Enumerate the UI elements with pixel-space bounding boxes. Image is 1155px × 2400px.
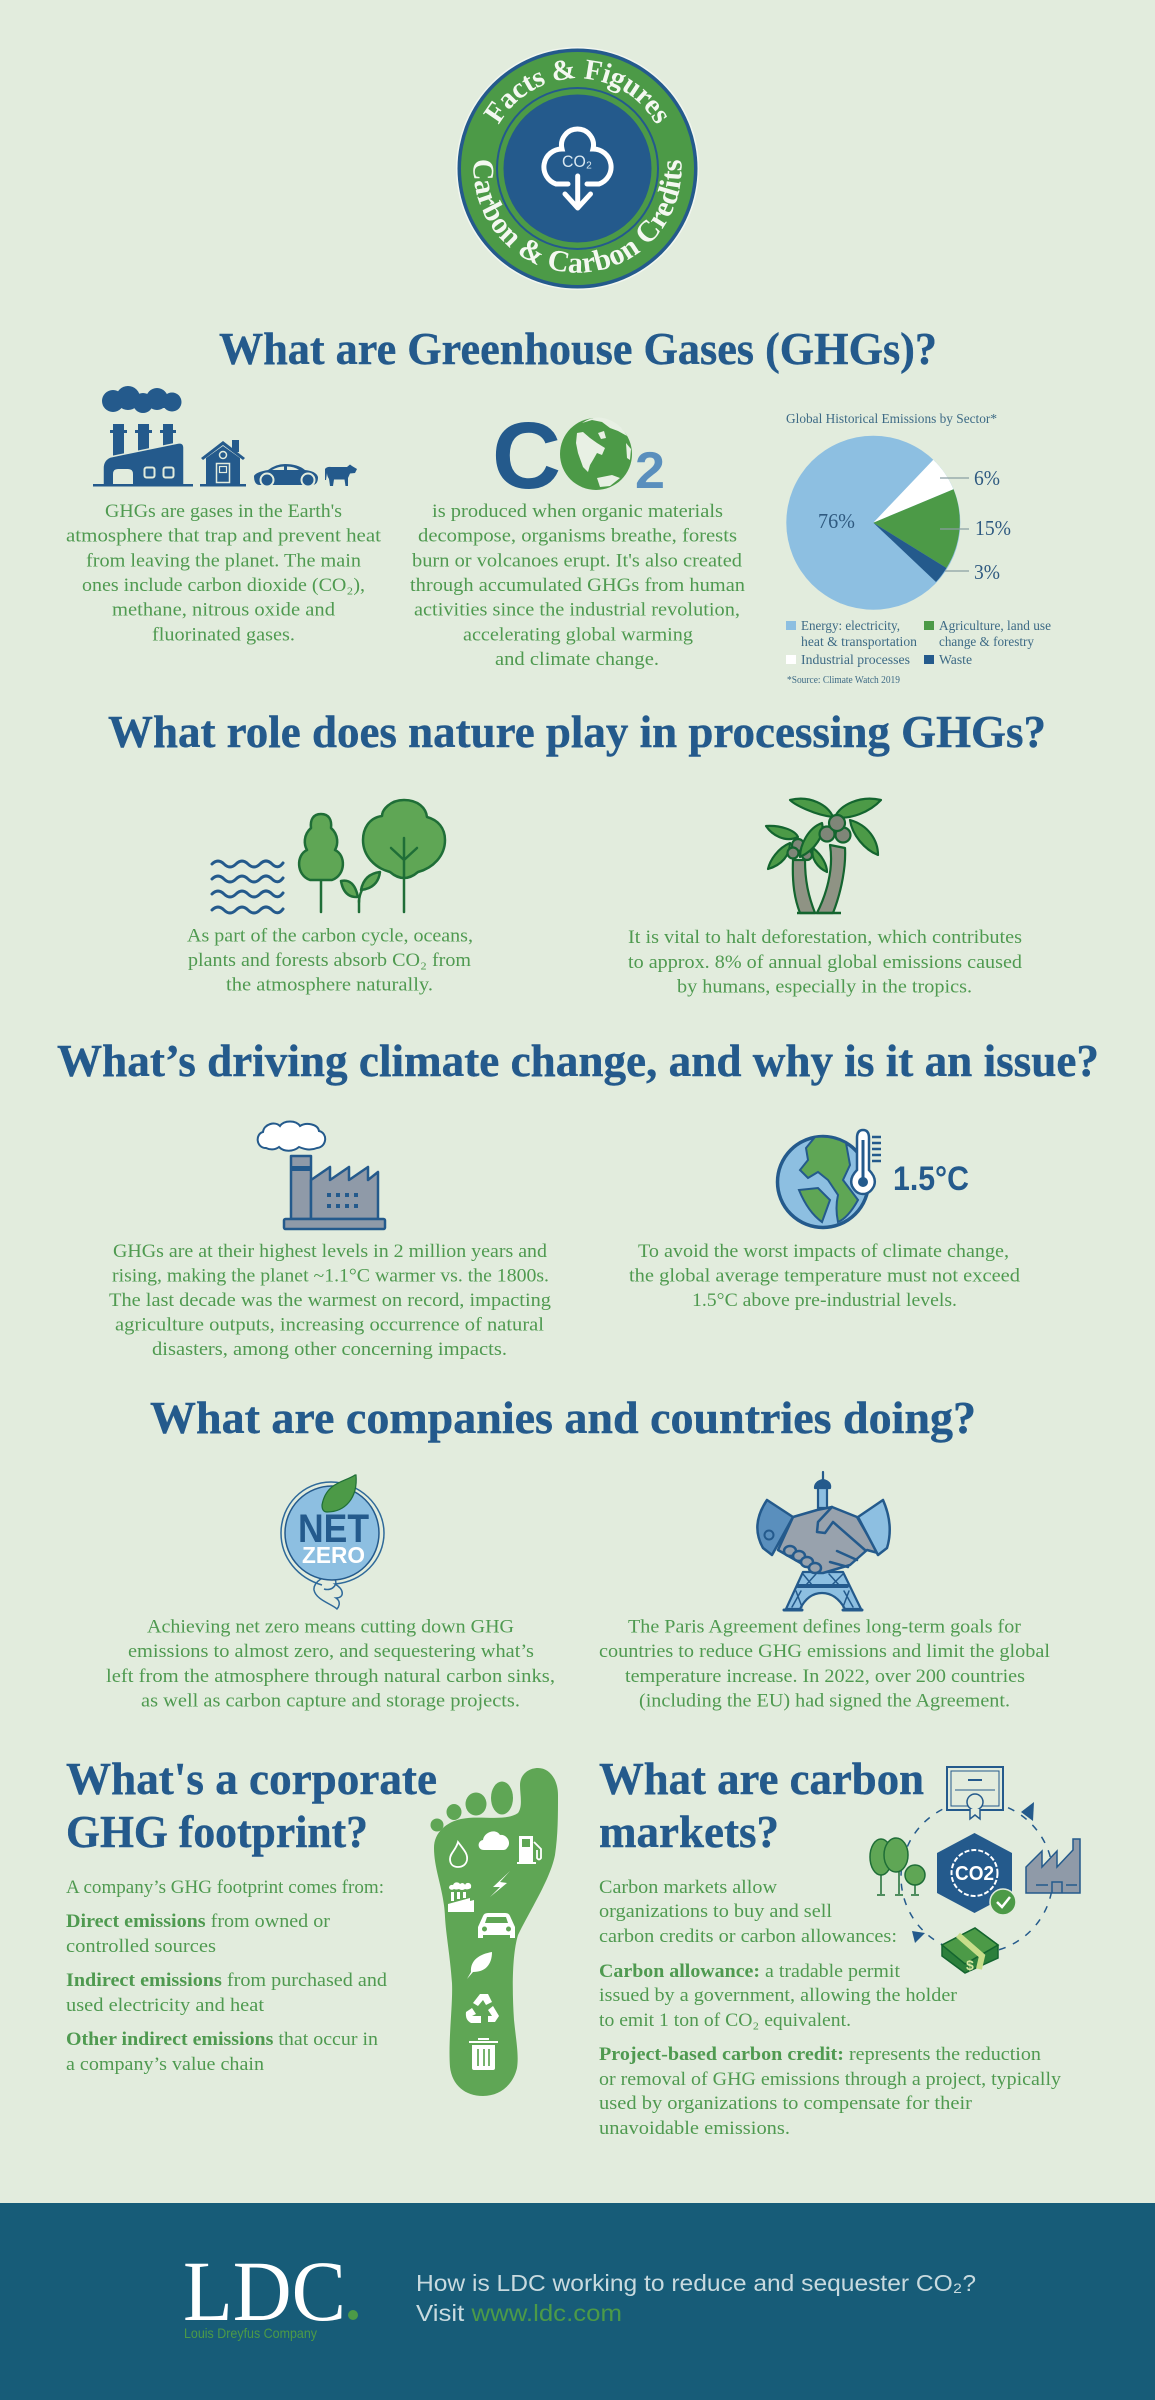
text block: carbon markets: or removal of GHG emissions through a project, typically	[599, 2070, 1062, 2090]
logo: LDC: Louis Dreyfus Company	[184, 2325, 317, 2341]
text block: footprint sources: controlled sources	[66, 1937, 216, 1957]
text block: net zero: emissions to almost zero, and sequestering what’s	[128, 1642, 534, 1662]
icon: CO2 with globe	[492, 403, 665, 509]
heading	[66, 1753, 437, 1857]
pie chart: emissions by sector: 6%	[974, 466, 1000, 490]
text block: CO2 explanation: and climate change.	[495, 650, 659, 670]
section: driving climate change	[57, 1035, 1099, 1360]
section: corporate GHG footprint	[66, 1753, 558, 2096]
heading: What's a corporate	[66, 1753, 437, 1804]
text block: carbon markets: carbon credits or carbon allowances:	[599, 1927, 897, 1947]
text block: CO2 explanation: decompose, organisms breathe, forests	[418, 527, 737, 547]
chart legend: Waste	[939, 652, 972, 667]
text block: carbon cycle: plants and forests absorb CO₂ from	[188, 951, 472, 971]
text block: carbon markets: Carbon allowance: a tradable permit	[599, 1962, 901, 1982]
text block: footprint sources: used electricity and heat	[66, 1996, 265, 2016]
heading	[599, 1753, 924, 1857]
icon: handshake over Eiffel tower	[757, 1472, 890, 1610]
text block: what GHGs are: from leaving the planet. The main	[86, 551, 361, 571]
text block: 1.5 degree limit: 1.5°C above pre-industrial levels.	[692, 1291, 957, 1311]
icon: stack of money: $	[966, 1957, 974, 1973]
heading: What are Greenhouse Gases (GHGs)?	[219, 323, 937, 374]
call to action: Visit www.ldc.com	[416, 2300, 622, 2326]
text block: carbon cycle	[187, 926, 473, 996]
text block: footprint sources: Other indirect emissions that occur in	[66, 2030, 378, 2050]
text block: GHG levels: The last decade was the warmest on record, impacting	[109, 1291, 551, 1311]
icon: cloud with CO2 and down arrow: CO₂	[562, 152, 592, 171]
text block: net zero: left from the atmosphere through natural carbon sinks,	[106, 1667, 555, 1687]
icon: net zero speech bubble with leaf: ZERO	[302, 1542, 365, 1568]
icon: green footprint with emission icons	[430, 1768, 558, 2096]
text block: what GHGs are: methane, nitrous oxide and	[112, 601, 336, 621]
section: What are Greenhouse Gases	[66, 323, 1051, 686]
heading: What are companies and countries doing?	[150, 1392, 976, 1443]
text block: what GHGs are: atmosphere that trap and prevent heat	[66, 527, 382, 547]
text block: carbon cycle: the atmosphere naturally.	[226, 976, 433, 996]
heading: markets?	[599, 1806, 779, 1857]
pie chart: emissions by sector: 76%	[818, 509, 855, 533]
text block: GHG levels: rising, making the planet ~1.1°C warmer vs. the 1800s.	[112, 1266, 549, 1286]
icon: CO2 hexagon with check mark	[937, 1833, 1016, 1915]
badge: Facts & Figures, Carbon & Carbon Credits: Carbon & Carbon Credits	[473, 160, 682, 273]
chart legend: Agriculture, land use	[939, 618, 1051, 633]
text block: deforestation	[628, 928, 1023, 998]
icon: certificate	[947, 1767, 1003, 1819]
icon: carbon market cycle	[870, 1767, 1080, 1973]
text block: Paris Agreement: (including the EU) had signed the Agreement.	[639, 1692, 1010, 1712]
heading: GHG footprint?	[66, 1806, 368, 1857]
text block: GHG levels	[109, 1242, 551, 1360]
icon: factory, house, car and cow	[93, 386, 357, 486]
text block: Paris Agreement: temperature increase. In 2022, over 200 countries	[625, 1667, 1025, 1687]
badge: Facts & Figures, Carbon & Carbon Credits	[456, 47, 699, 290]
text block: what GHGs are: GHGs are gases in the Earth's	[105, 502, 342, 522]
text block: deforestation: to approx. 8% of annual global emissions caused	[628, 953, 1023, 973]
text block: CO2 explanation	[410, 502, 745, 670]
icon: CO2 with globe: C	[492, 403, 561, 509]
call to action	[416, 2270, 976, 2326]
text block: 1.5 degree limit: To avoid the worst impacts of climate change,	[638, 1242, 1009, 1262]
text block: net zero	[106, 1617, 555, 1712]
chart legend: Industrial processes	[801, 652, 910, 667]
section: nature's role	[108, 706, 1046, 998]
text block: what GHGs are: fluorinated gases.	[152, 625, 295, 645]
logo: LDC: LDC	[183, 2243, 346, 2339]
text block: CO2 explanation: is produced when organic materials	[432, 502, 723, 522]
text block: footprint sources: A company’s GHG footprint comes from:	[66, 1878, 384, 1898]
text block: what GHGs are: ones include carbon dioxide (CO₂),	[82, 576, 365, 596]
text block: carbon markets: Carbon markets allow	[599, 1878, 778, 1898]
text block: net zero: as well as carbon capture and storage projects.	[141, 1692, 520, 1712]
text block: carbon cycle: As part of the carbon cycle, oceans,	[187, 926, 473, 946]
section: companies and countries	[106, 1392, 1050, 1712]
badge: Facts & Figures, Carbon & Carbon Credits: Facts & Figures	[483, 60, 667, 124]
text block: deforestation: by humans, especially in the tropics.	[677, 978, 972, 998]
text block: carbon markets: organizations to buy and sell	[599, 1902, 832, 1922]
icon: CO2 hexagon with check mark: CO2	[955, 1863, 994, 1885]
icon: net zero speech bubble with leaf	[281, 1475, 384, 1609]
text block: 1.5 degree limit	[629, 1242, 1021, 1311]
text block: net zero: Achieving net zero means cutting down GHG	[147, 1617, 514, 1637]
icon: stack of money	[942, 1928, 998, 1973]
chart legend: Energy: electricity,	[801, 618, 900, 633]
text block: Paris Agreement: The Paris Agreement defines long-term goals for	[628, 1617, 1021, 1637]
text block: Paris Agreement: countries to reduce GHG emissions and limit the global	[599, 1642, 1050, 1662]
text block: footprint sources: Indirect emissions from purchased and	[66, 1971, 388, 1991]
chart title: Global Historical Emissions by Sector*	[786, 411, 997, 426]
text block: footprint sources	[66, 1878, 388, 2075]
icon: globe with thermometer and 1.5°C: 1.5°C	[893, 1160, 969, 1198]
text block: GHG levels: GHGs are at their highest levels in 2 million years and	[113, 1242, 548, 1262]
icon: CO2 with globe: 2	[635, 442, 665, 500]
text block: carbon markets: unavoidable emissions.	[599, 2119, 790, 2139]
call to action: How is LDC working to reduce and sequester CO₂?	[416, 2270, 976, 2296]
text block: GHG levels: disasters, among other concerning impacts.	[152, 1340, 507, 1360]
text block: 1.5 degree limit: the global average temperature must not exceed	[629, 1266, 1021, 1286]
icon: cloud with CO2 and down arrow	[544, 129, 611, 208]
icon: grey factory with cloud	[258, 1122, 385, 1229]
section: carbon markets	[599, 1753, 1080, 2139]
text block: carbon markets	[599, 1878, 1062, 2139]
text block: Paris Agreement	[599, 1617, 1050, 1712]
icon: grey factory	[1026, 1839, 1080, 1893]
heading: What role does nature play in processing GHGs?	[108, 706, 1046, 757]
icon: net zero speech bubble with leaf: NET	[298, 1507, 369, 1551]
text block: what GHGs are	[66, 502, 382, 645]
heading: What are carbon	[599, 1753, 924, 1804]
heading: What’s driving climate change, and why is it an issue?	[57, 1035, 1099, 1086]
icon: waves and trees	[212, 800, 445, 913]
pie chart: emissions by sector: 3%	[974, 560, 1000, 584]
text block: carbon markets: Project-based carbon credit: represents the reduction	[599, 2045, 1041, 2065]
text block: CO2 explanation: accelerating global warming	[463, 625, 693, 645]
text block: GHG levels: agriculture outputs, increasing occurrence of natural	[115, 1316, 544, 1336]
chart legend: *Source: Climate Watch 2019	[787, 675, 900, 686]
text block: carbon markets: to emit 1 ton of CO₂ equivalent.	[599, 2011, 851, 2031]
icon: trees	[870, 1838, 925, 1895]
pie chart: emissions by sector: 15%	[975, 516, 1011, 540]
text block: deforestation: It is vital to halt deforestation, which contributes	[628, 928, 1022, 948]
pie chart: emissions by sector	[786, 436, 1011, 610]
text block: footprint sources: a company’s value chain	[66, 2055, 264, 2075]
text block: carbon markets: issued by a government, allowing the holder	[599, 1986, 957, 2006]
icon: globe with thermometer and 1.5°C	[778, 1130, 969, 1228]
text block: footprint sources: Direct emissions from owned or	[66, 1912, 330, 1932]
chart legend	[786, 618, 1051, 686]
text block: CO2 explanation: through accumulated GHGs from human	[410, 576, 745, 596]
icon: palm trees	[766, 799, 881, 913]
chart legend: change & forestry	[939, 634, 1034, 649]
text block: CO2 explanation: activities since the industrial revolution,	[414, 601, 740, 621]
text block: carbon markets: used by organizations to compensate for their	[599, 2094, 972, 2114]
chart legend: heat & transportation	[801, 634, 917, 649]
footer band	[0, 2203, 1155, 2400]
text block: CO2 explanation: burn or volcanoes erupt. It's also created	[412, 551, 743, 571]
